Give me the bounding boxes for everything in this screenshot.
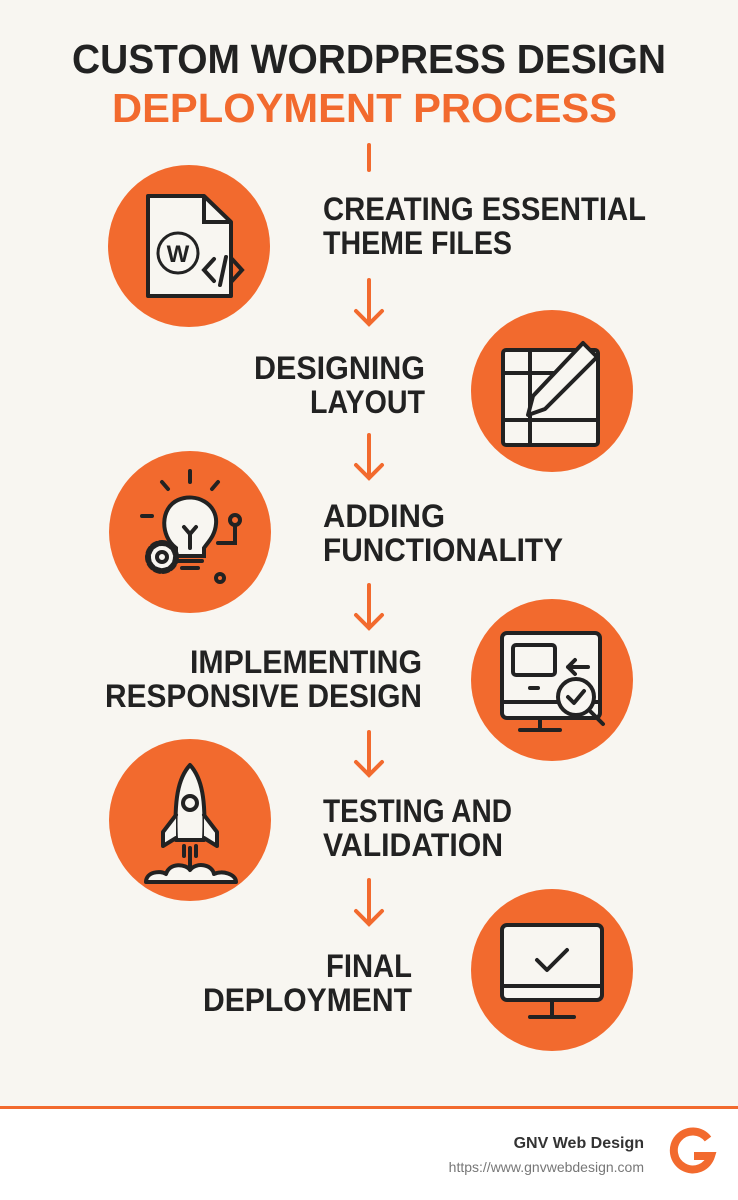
icon: theme file: W: [167, 241, 190, 268]
footer brand text: GNV Web Design: [514, 1135, 644, 1152]
footer brand text: [449, 1135, 644, 1175]
step 5: testing and validation: VALIDATION: [323, 827, 503, 863]
step 6: final deployment: [203, 889, 633, 1051]
step 6: final deployment: FINAL: [326, 948, 412, 984]
step 4: implementing responsive design: IMPLEMENTING: [190, 644, 422, 680]
step 1: creating essential theme files: CREATING ESSENTIAL: [323, 191, 646, 227]
title: [72, 36, 666, 131]
icon: lightbulb and gear: [109, 451, 271, 613]
step 3: adding functionality: ADDING: [323, 498, 445, 534]
step 4: implementing responsive design: RESPONSIVE DESIGN: [105, 678, 422, 714]
step 5: testing and validation: [109, 739, 512, 901]
step 1: creating essential theme files: THEME FILES: [323, 225, 512, 261]
logo: G mark: [674, 1131, 711, 1169]
step 6: final deployment: DEPLOYMENT: [203, 982, 412, 1018]
step 3: adding functionality: [109, 451, 563, 613]
step 2: designing layout: LAYOUT: [310, 384, 425, 420]
footer: [0, 1106, 738, 1200]
title: CUSTOM WORDPRESS DESIGN: [72, 36, 666, 82]
icon: rocket: [109, 739, 271, 901]
title: DEPLOYMENT PROCESS: [112, 85, 617, 131]
step 2: designing layout: [254, 310, 633, 472]
step 5: testing and validation: TESTING AND: [323, 793, 512, 829]
step 2: designing layout: DESIGNING: [254, 350, 425, 386]
arrows: flow connectors: [356, 145, 382, 924]
icon: layout grid with pencil: [471, 310, 633, 472]
step 4: implementing responsive design: [105, 599, 633, 761]
step 3: adding functionality: FUNCTIONALITY: [323, 532, 563, 568]
footer brand text: https://www.gnvwebdesign.com: [449, 1159, 644, 1175]
icon: theme file: [108, 165, 270, 327]
icon: monitor with magnifier: [471, 599, 633, 761]
icon: monitor with check: [471, 889, 633, 1051]
step 1: creating essential theme files: [108, 165, 646, 327]
